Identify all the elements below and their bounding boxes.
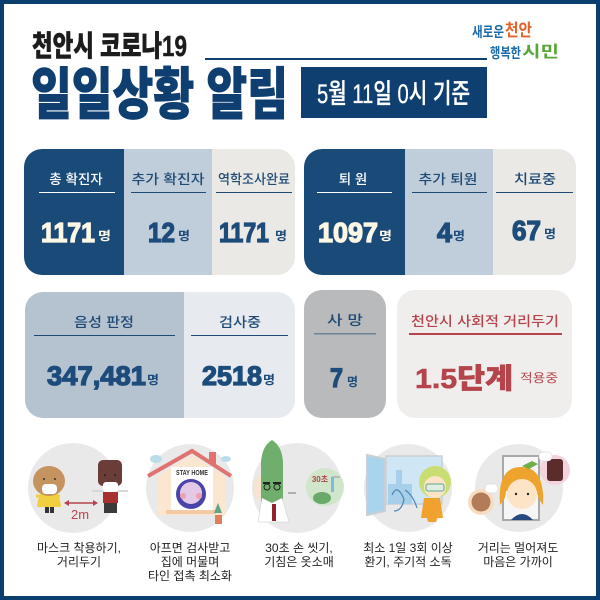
under treatment: 명 xyxy=(544,227,556,241)
panel: discharged xyxy=(304,149,576,275)
title line 1: 천안시 코로나19 xyxy=(32,30,187,63)
being tested: 명 xyxy=(263,373,275,387)
header rule xyxy=(205,58,487,60)
negative results: 음성 판정 xyxy=(74,315,134,330)
under treatment xyxy=(496,172,573,246)
caption: stay home if sick: 집에 머물며 xyxy=(161,555,219,569)
epidemiological investigation complete: 1171 xyxy=(219,217,269,248)
discharged total: 1097 xyxy=(318,217,378,248)
total confirmed: 1171 xyxy=(41,217,95,248)
logo slogan: 행복한 xyxy=(490,45,521,61)
caption: stay home if sick: 아프면 검사받고 xyxy=(150,541,230,555)
logo slogan: 시민 xyxy=(522,43,559,61)
added discharged: 추가 퇴원 xyxy=(418,172,478,187)
added confirmed xyxy=(131,172,206,248)
caption: stay home if sick: 타인 접촉 최소화 xyxy=(148,569,232,583)
epidemiological investigation complete: 역학조사완료 xyxy=(218,172,290,187)
caption: hand washing: 기침은 옷소매 xyxy=(264,555,334,569)
caption: stay close at heart: 마음은 가까이 xyxy=(483,555,553,569)
added discharged xyxy=(412,172,487,248)
negative results: 명 xyxy=(147,373,159,387)
under treatment: 67 xyxy=(512,215,541,246)
panel: deaths: 사 망 xyxy=(327,313,363,328)
being tested: 검사중 xyxy=(219,315,261,330)
panel: deaths: 7 xyxy=(330,363,343,393)
added confirmed: 12 xyxy=(148,217,175,248)
total confirmed xyxy=(39,172,115,248)
icon: mask and 2m distance xyxy=(28,443,128,533)
icon: ventilation window xyxy=(364,444,452,532)
discharged total xyxy=(317,172,392,248)
caption: ventilation: 환기, 주기적 소독 xyxy=(364,555,452,569)
added confirmed: 추가 확진자 xyxy=(132,172,205,187)
logo slogan xyxy=(472,21,559,61)
under treatment: 치료중 xyxy=(514,172,556,187)
caption: hand washing: 30초 손 씻기, xyxy=(265,541,333,555)
being tested: 2518 xyxy=(202,361,262,391)
date banner xyxy=(301,67,487,118)
discharged total: 퇴 원 xyxy=(339,172,367,187)
panel: social distancing level: 적용중 xyxy=(520,371,558,385)
title line 2: 일일상황 알림 xyxy=(31,63,288,126)
caption: stay close at heart: 거리는 멀어져도 xyxy=(478,541,558,555)
icon: stay home xyxy=(146,444,234,532)
negative results xyxy=(34,315,175,391)
logo slogan: 새로운 xyxy=(472,24,504,40)
negative results: 347,481 xyxy=(47,361,146,391)
caption: mask and distance: 마스크 착용하기, xyxy=(37,541,121,555)
panel: tests xyxy=(25,292,295,418)
date banner: 5월 11일 0시 기준 xyxy=(317,79,470,109)
being tested xyxy=(191,315,288,391)
epidemiological investigation complete: 명 xyxy=(275,229,287,243)
logo slogan: 천안 xyxy=(505,21,532,40)
total confirmed: 명 xyxy=(98,229,111,243)
added discharged: 4 xyxy=(437,217,452,248)
caption: ventilation: 최소 1일 3회 이상 xyxy=(363,541,453,555)
icon: mask and 2m distance: 2m xyxy=(71,507,89,522)
discharged total: 명 xyxy=(379,229,392,243)
icon: stay home: STAY HOME xyxy=(176,468,208,477)
icon: keep in touch xyxy=(468,444,570,532)
icon: hand washing and cough etiquette xyxy=(252,440,344,533)
panel: social distancing level: 1.5단계 xyxy=(415,363,513,394)
panel: confirmed cases xyxy=(24,149,295,275)
added confirmed: 명 xyxy=(178,229,190,243)
total confirmed: 총 확진자 xyxy=(49,172,103,187)
added discharged: 명 xyxy=(453,229,465,243)
panel: deaths: 명 xyxy=(347,375,358,389)
icon: hand washing and cough etiquette: 30초 xyxy=(312,475,329,484)
panel: social distancing level: 천안시 사회적 거리두기 xyxy=(411,314,559,329)
panel: social distancing level xyxy=(397,290,572,418)
epidemiological investigation complete xyxy=(216,172,292,248)
caption: mask and distance: 거리두기 xyxy=(57,555,101,569)
panel: deaths xyxy=(304,290,386,418)
